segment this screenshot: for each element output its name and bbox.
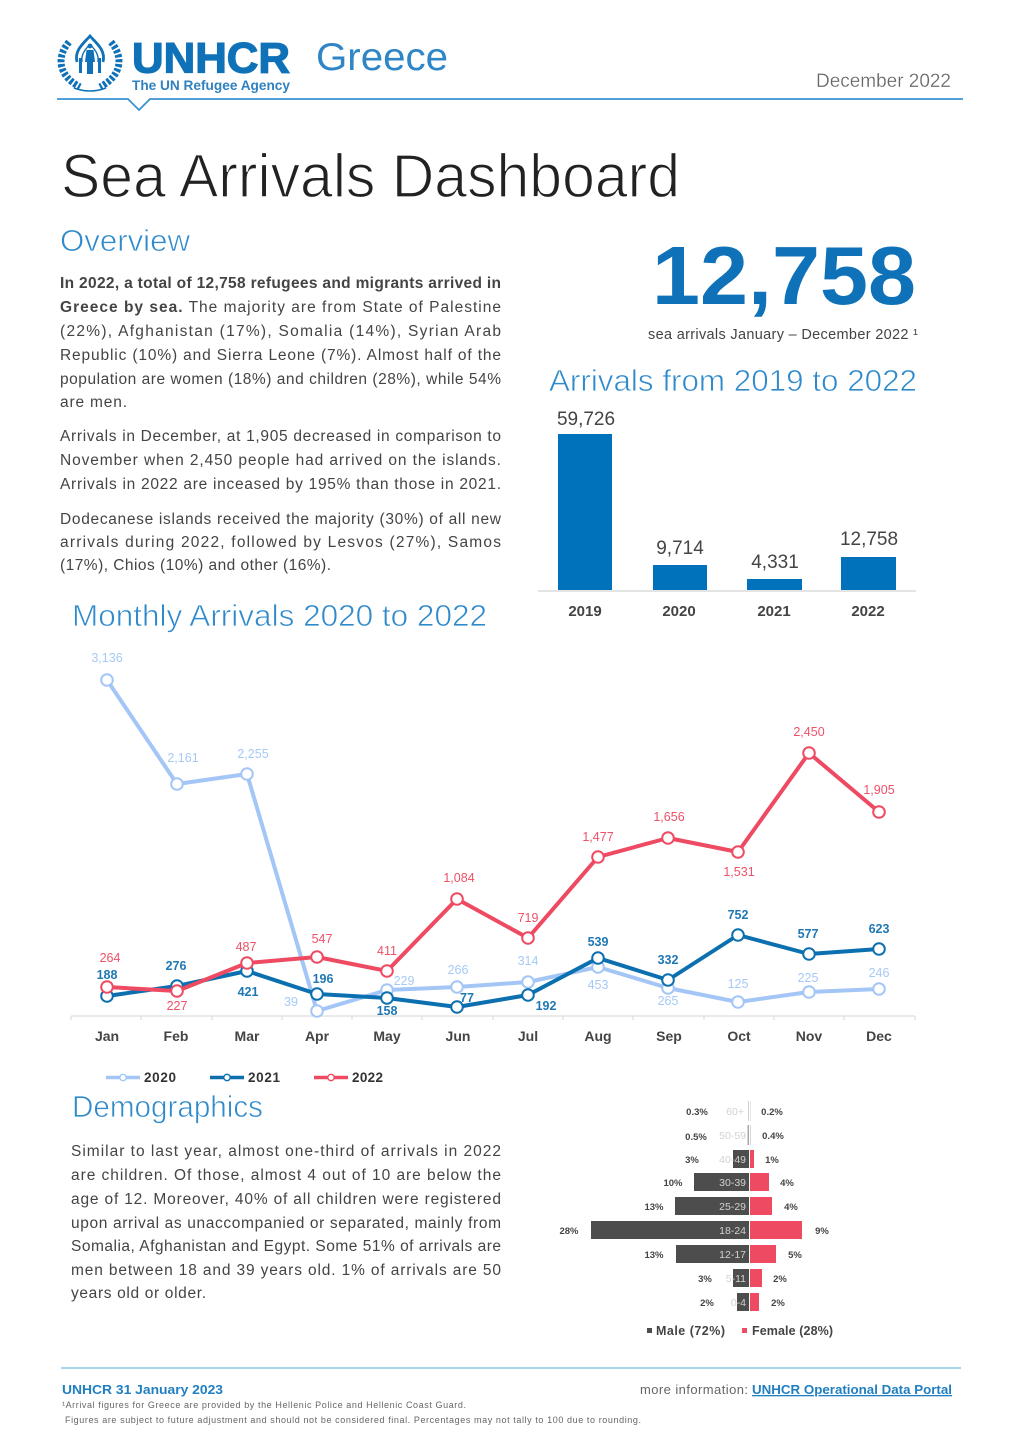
- month axis labels: Oct: [727, 1028, 751, 1044]
- percentage labels: 0.4%: [762, 1131, 784, 1142]
- legend: line chart: 2020: [144, 1070, 176, 1085]
- legend: line chart: 2022: [352, 1070, 383, 1085]
- month axis labels: Sep: [656, 1028, 682, 1044]
- percentage labels: 13%: [644, 1202, 664, 1213]
- footnotes: Figures are subject to future adjustment and should not be considered final. Percentages may not tally to 100 due to rounding.: [65, 1415, 641, 1425]
- logo tagline: The UN Refugee Agency: [132, 77, 290, 93]
- age labels: 5-11: [726, 1273, 746, 1285]
- text block: overview: Dodecanese islands received the majority (30%) of all new: [60, 511, 502, 528]
- heading: overview: Overview: [60, 223, 191, 258]
- text block: demographics: men between 18 and 39 years old. 1% of arrivals are 50: [71, 1262, 501, 1279]
- data labels: 2020: 125: [728, 977, 748, 991]
- footer link: UNHCR Operational Data Portal: [752, 1382, 952, 1397]
- age labels: 30-39: [719, 1177, 746, 1189]
- title: Sea Arrivals Dashboard: [61, 142, 680, 210]
- heading: demographics: Demographics: [72, 1089, 263, 1124]
- data labels: 2022: 719: [518, 911, 538, 925]
- legend: line chart: 2021: [248, 1070, 280, 1085]
- percentage labels: 5%: [788, 1250, 802, 1261]
- age labels: 18-24: [719, 1225, 746, 1237]
- percentage labels: 4%: [784, 1202, 798, 1213]
- data labels: 2020: 246: [869, 966, 889, 980]
- percentage labels: 0.2%: [761, 1107, 783, 1118]
- percentage labels: 13%: [644, 1250, 664, 1261]
- percentage labels: 9%: [815, 1226, 829, 1237]
- data labels: 2021: 752: [728, 908, 748, 922]
- pyramid legend: Female (28%): [752, 1324, 833, 1338]
- data labels: 2020: 39: [284, 995, 298, 1009]
- series: 2020: [101, 674, 885, 1017]
- population pyramid: [559, 1101, 833, 1338]
- heading: arrivals 2019 to 2022: Arrivals from 2019 to 2022: [549, 363, 917, 398]
- bar chart: yearly arrivals: 2021: [757, 603, 791, 620]
- percentage labels: 2%: [773, 1274, 787, 1285]
- data labels: 2021: 623: [869, 922, 889, 936]
- heading: monthly arrivals: Monthly Arrivals 2020 to 2022: [72, 598, 487, 633]
- percentage labels: 1%: [765, 1155, 779, 1166]
- data labels: 2022: 547: [312, 932, 332, 946]
- text block: overview: [60, 275, 502, 574]
- text block: overview: Arrivals in 2022 are inceased by 195% than those in 2021.: [60, 476, 501, 493]
- data labels: 2022: 411: [377, 944, 397, 958]
- data labels: 2021: 192: [536, 999, 556, 1013]
- month axis labels: Jun: [446, 1028, 470, 1044]
- data labels: 2021: 276: [166, 959, 186, 973]
- icon: UNHCR emblem: [61, 36, 119, 91]
- text block: overview: Republic (10%) and Sierra Leone (7%). Almost half of the: [60, 347, 501, 364]
- text block: overview: November when 2,450 people had arrived on the islands.: [60, 452, 501, 469]
- data labels: 2022: [100, 725, 895, 1013]
- data labels: 2022: 487: [236, 940, 256, 954]
- data labels: 2021: 577: [798, 927, 818, 941]
- header rule with notch: [57, 99, 963, 110]
- data labels: 2021: 158: [377, 1004, 397, 1018]
- data labels: 2020: 265: [658, 994, 678, 1008]
- percentage labels: 0.5%: [685, 1132, 707, 1143]
- data labels: 2020: 453: [588, 978, 608, 992]
- data labels: 2022: 1,531: [723, 865, 755, 879]
- bar chart: yearly arrivals: 59,726: [557, 409, 615, 430]
- age labels: 12-17: [719, 1249, 746, 1261]
- bar chart: yearly arrivals: 2019: [568, 603, 602, 620]
- legend: line chart: [106, 1070, 383, 1085]
- month axis labels: [95, 1028, 892, 1044]
- data labels: 2022: 264: [100, 951, 120, 965]
- footer more information: more information:: [640, 1382, 748, 1397]
- big number caption: sea arrivals January – December 2022 ¹: [648, 327, 918, 343]
- percentage labels: [559, 1107, 829, 1309]
- bar chart: yearly arrivals: 2020: [662, 603, 696, 620]
- data labels: 2021: 539: [588, 935, 608, 949]
- footer source: UNHCR 31 January 2023: [62, 1383, 223, 1397]
- month axis labels: May: [373, 1028, 401, 1044]
- month axis labels: Apr: [305, 1028, 330, 1044]
- series: 2022: [101, 747, 885, 997]
- pyramid legend: [647, 1324, 833, 1338]
- data labels: 2022: 1,905: [863, 783, 895, 797]
- female bars: [750, 1101, 802, 1311]
- footnotes: [62, 1400, 641, 1425]
- data labels: 2020: 229: [394, 974, 414, 988]
- pyramid legend: Male (72%): [656, 1324, 725, 1338]
- month axis labels: Dec: [866, 1028, 892, 1044]
- percentage labels: 2%: [700, 1298, 714, 1309]
- bar chart: yearly arrivals: 12,758: [840, 529, 898, 550]
- data labels: 2020: 225: [798, 971, 818, 985]
- text block: demographics: years old or older.: [71, 1285, 206, 1302]
- text block: demographics: are children. Of those, almost 4 out of 10 are below the: [71, 1167, 501, 1184]
- percentage labels: 10%: [663, 1178, 683, 1189]
- age labels: 0-4: [731, 1297, 746, 1309]
- data labels: 2020: 3,136: [91, 651, 123, 665]
- data labels: 2020: 266: [448, 963, 468, 977]
- text block: overview: Greece by sea. The majority are from State of Palestine: [60, 299, 501, 316]
- age labels: 50-59: [719, 1130, 746, 1142]
- age labels: 25-29: [719, 1201, 746, 1213]
- text block: overview: are men.: [60, 394, 127, 411]
- age labels: [719, 1106, 746, 1309]
- data labels: 2021: 77: [460, 991, 474, 1005]
- text block: demographics: Somalia, Afghanistan and Egypt. Some 51% of arrivals are: [71, 1238, 501, 1255]
- data labels: 2021: 196: [313, 972, 333, 986]
- month axis labels: Jan: [95, 1028, 119, 1044]
- data labels: 2020: 2,255: [237, 747, 269, 761]
- report date: December 2022: [816, 71, 951, 92]
- logo wordmark: UNHCR: [132, 34, 290, 82]
- data labels: 2020: 2,161: [167, 751, 199, 765]
- month axis labels: Jul: [518, 1028, 538, 1044]
- series: 2021: [101, 929, 885, 1013]
- big number: total arrivals: 12,758: [652, 229, 916, 322]
- percentage labels: 2%: [771, 1298, 785, 1309]
- text block: overview: (17%), Chios (10%) and other (16%).: [60, 557, 331, 574]
- percentage labels: 4%: [780, 1178, 794, 1189]
- text block: overview: Arrivals in December, at 1,905 decreased in comparison to: [60, 428, 501, 445]
- bar chart: yearly arrivals: [538, 409, 916, 620]
- data labels: 2021: 421: [238, 985, 258, 999]
- month axis labels: Feb: [164, 1028, 188, 1044]
- bar chart: yearly arrivals: 9,714: [656, 538, 704, 559]
- country name: Greece: [316, 36, 448, 79]
- text block: demographics: upon arrival as unaccompanied or separated, mainly from: [71, 1215, 501, 1232]
- text block: demographics: [71, 1143, 501, 1302]
- data labels: 2022: 2,450: [793, 725, 825, 739]
- bar chart: yearly arrivals: 4,331: [751, 552, 799, 573]
- text block: overview: In 2022, a total of 12,758 refugees and migrants arrived in: [60, 275, 501, 292]
- text block: overview: population are women (18%) and children (28%), while 54%: [60, 371, 501, 388]
- data labels: 2022: 1,477: [582, 830, 614, 844]
- age labels: 40-49: [719, 1154, 746, 1166]
- data labels: 2021: 332: [658, 953, 678, 967]
- header: UNHCR logo and country: [61, 34, 448, 93]
- percentage labels: 3%: [685, 1155, 699, 1166]
- text block: overview: arrivals during 2022, followed by Lesvos (27%), Samos: [60, 534, 501, 551]
- footnotes: ¹Arrival figures for Greece are provided by the Hellenic Police and Hellenic Coast Guard.: [62, 1400, 466, 1410]
- data labels: 2022: 1,656: [653, 810, 685, 824]
- age labels: 60+: [726, 1106, 744, 1118]
- month axis labels: Mar: [235, 1028, 260, 1044]
- footer: [61, 1368, 961, 1425]
- text block: overview: (22%), Afghanistan (17%), Somalia (14%), Syrian Arab: [60, 323, 501, 340]
- percentage labels: 3%: [698, 1274, 712, 1285]
- data labels: 2021: 188: [97, 968, 117, 982]
- data labels: 2020: 314: [518, 954, 538, 968]
- month axis labels: Nov: [796, 1028, 822, 1044]
- data labels: 2022: 227: [167, 999, 187, 1013]
- data labels: 2022: 1,084: [443, 871, 475, 885]
- line chart: monthly arrivals: [71, 651, 915, 1044]
- data labels: 2021: [97, 908, 889, 1018]
- text block: demographics: age of 12. Moreover, 40% of all children were registered: [71, 1191, 501, 1208]
- bar chart: yearly arrivals: 2022: [851, 603, 885, 620]
- percentage labels: 28%: [559, 1226, 579, 1237]
- data labels: 2020: [91, 651, 889, 1009]
- male bars: [591, 1101, 749, 1311]
- text block: demographics: Similar to last year, almost one-third of arrivals in 2022: [71, 1143, 501, 1160]
- percentage labels: 0.3%: [686, 1107, 708, 1118]
- month axis labels: Aug: [584, 1028, 612, 1044]
